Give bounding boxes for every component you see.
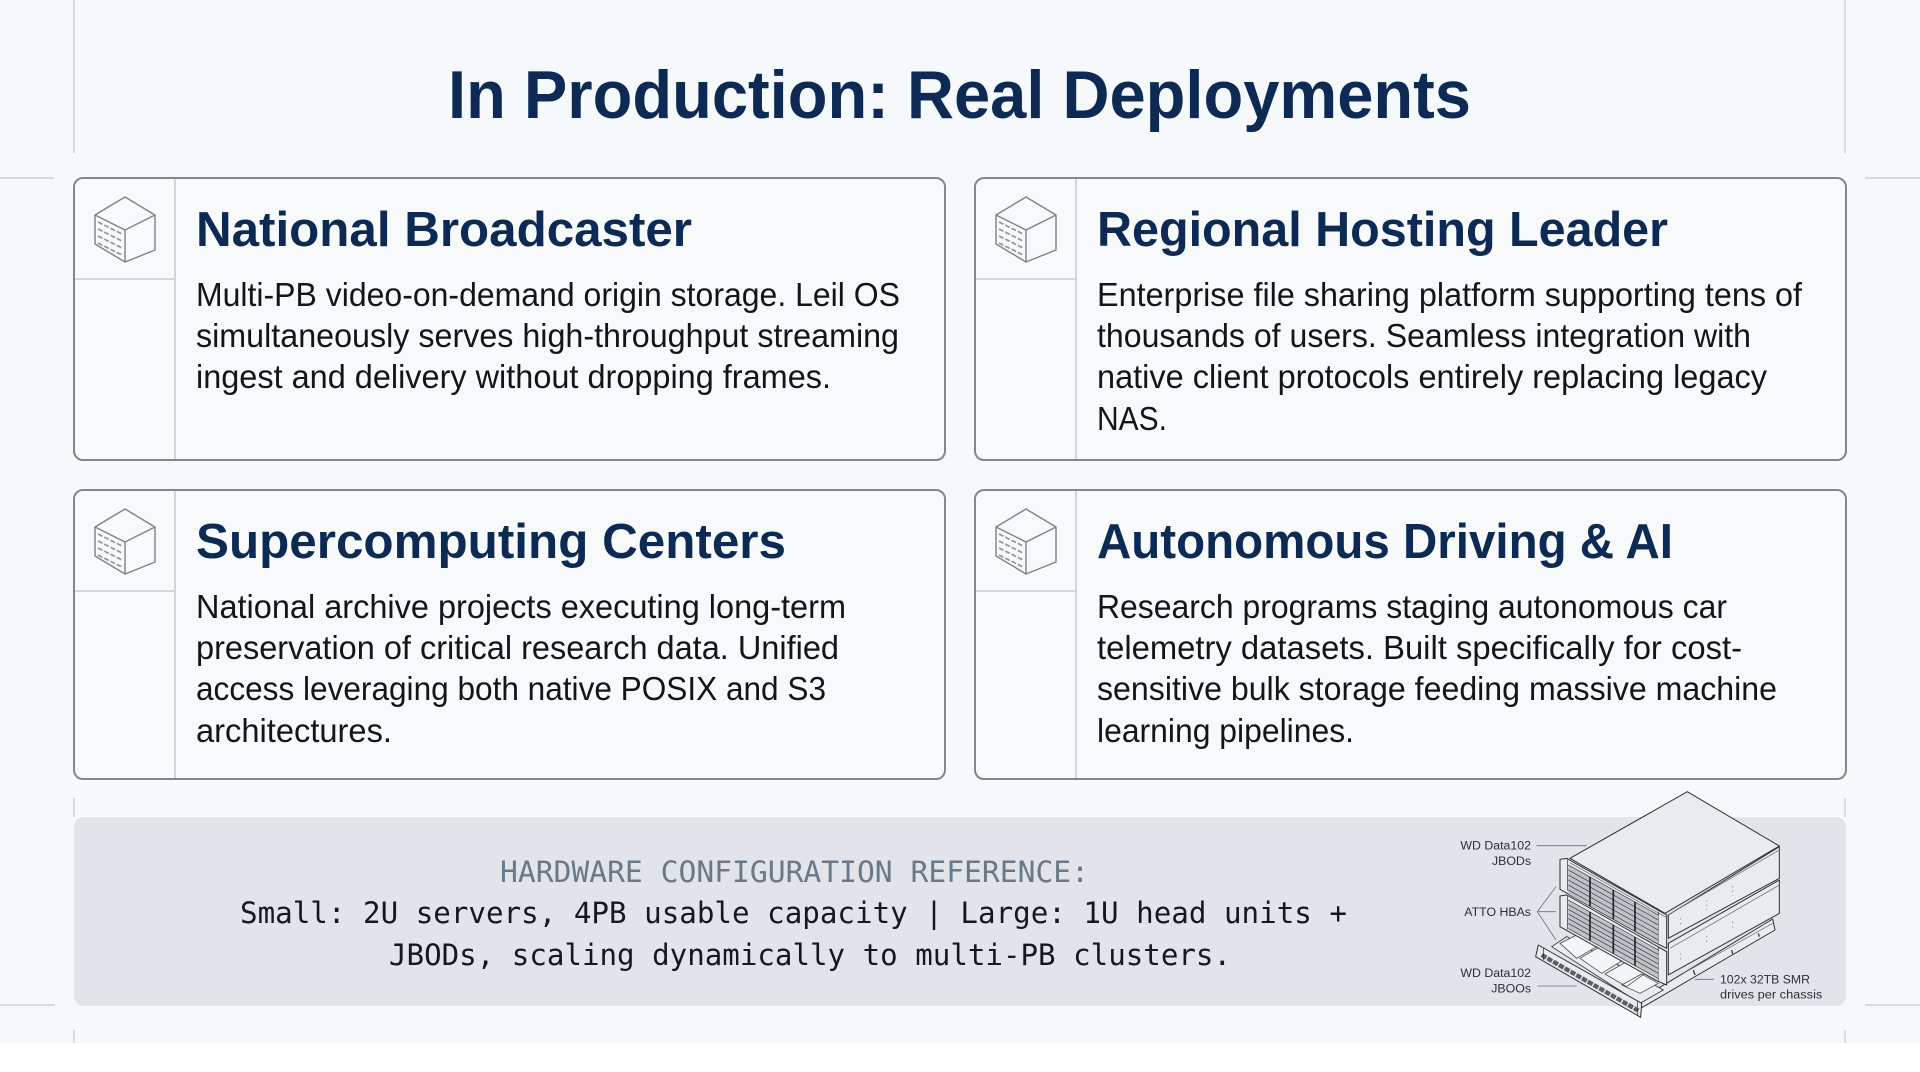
card text: ingest and delivery without dropping frames. [196, 359, 831, 396]
label: WD Data102 JBODs top: JBODs [1492, 854, 1531, 868]
leader lines [1537, 846, 1714, 986]
hardware text [240, 896, 1347, 972]
icon: server cube [996, 197, 1056, 262]
lower server [1560, 880, 1779, 985]
card text: telemetry datasets. Built specifically for cost- [1097, 630, 1742, 667]
panel: Regional Hosting Leader [975, 178, 1846, 460]
upper server [1560, 792, 1779, 961]
panel: National Broadcaster [74, 178, 945, 460]
card text: access leveraging both native POSIX and S3 [196, 671, 826, 708]
card text: sensitive bulk storage feeding massive machine [1097, 671, 1777, 708]
card text [196, 277, 900, 396]
card text: preservation of critical research data. Unified [196, 630, 839, 667]
label: drives per chassis: 102x 32TB SMR [1720, 972, 1810, 986]
card text [196, 589, 846, 750]
card text [1097, 589, 1777, 750]
card heading: Autonomous Driving & AI [1097, 515, 1673, 569]
hardware text: JBODs, scaling dynamically to multi-PB clusters. [389, 938, 1231, 972]
card heading: Regional Hosting Leader [1097, 203, 1668, 257]
card text: architectures. [196, 713, 392, 750]
card text: National archive projects executing long-term [196, 589, 846, 626]
panel: Supercomputing Centers [74, 490, 945, 779]
card text [1097, 277, 1803, 438]
label: WD Data102 JBOOs bottom: WD Data102 [1460, 966, 1531, 980]
panel: hardware configuration [74, 817, 1846, 1006]
icon: server cube [95, 509, 155, 574]
card text: Multi-PB video-on-demand origin storage. Leil OS [196, 277, 900, 314]
title: In Production: Real Deployments [448, 57, 1471, 133]
label: WD Data102 JBOOs bottom [1460, 966, 1531, 995]
label: WD Data102 JBODs top [1460, 838, 1531, 868]
label: drives per chassis [1720, 972, 1822, 1001]
card text: Enterprise file sharing platform supporting tens of [1097, 277, 1803, 314]
card text: learning pipelines. [1097, 713, 1354, 750]
label: drives per chassis: drives per chassis [1720, 987, 1822, 1001]
label: WD Data102 JBOOs bottom: JBOOs [1491, 981, 1531, 995]
label: WD Data102 JBODs top: WD Data102 [1460, 838, 1531, 852]
panel: Autonomous Driving & AI [975, 490, 1846, 779]
diagram: server stack [1460, 792, 1822, 1017]
hardware heading: HARDWARE CONFIGURATION REFERENCE: [500, 855, 1089, 889]
label: ATTO HBAs: ATTO HBAs [1464, 905, 1531, 919]
card text: NAS. [1097, 401, 1167, 438]
icon: server cube [95, 197, 155, 262]
card text: thousands of users. Seamless integration with [1097, 318, 1751, 355]
tray [1536, 919, 1775, 1017]
card text: native client protocols entirely replacing legacy [1097, 359, 1767, 396]
card heading: National Broadcaster [196, 203, 692, 257]
card text: simultaneously serves high-throughput streaming [196, 318, 899, 355]
icon: server cube [996, 509, 1056, 574]
hardware text: Small: 2U servers, 4PB usable capacity | Large: 1U head units + [240, 896, 1347, 931]
card text: Research programs staging autonomous car [1097, 589, 1727, 626]
card heading: Supercomputing Centers [196, 515, 786, 569]
